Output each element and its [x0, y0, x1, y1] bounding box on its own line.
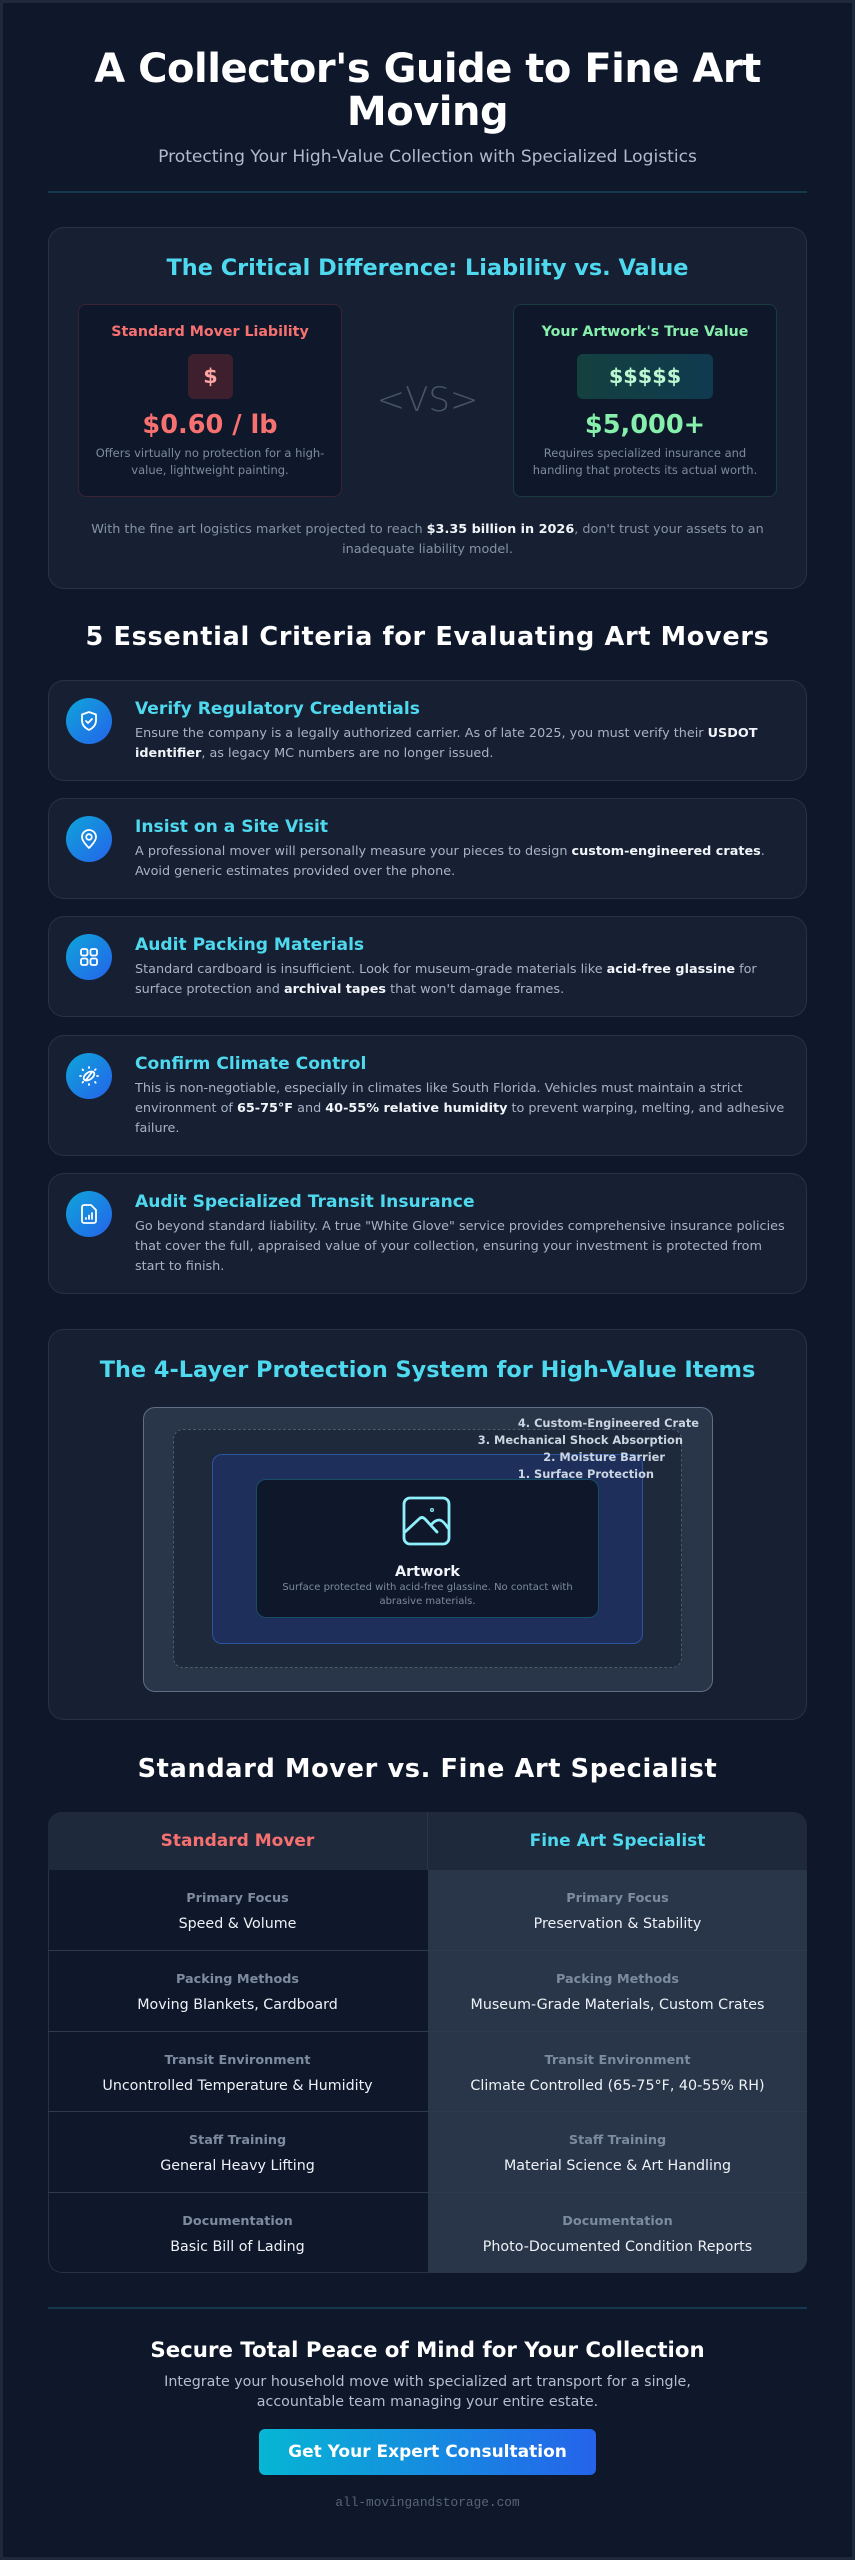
criterion text [135, 962, 757, 997]
row: documentation specialist: Photo-Documented Condition Reports [483, 2239, 752, 2255]
artwork description: abrasive materials. [379, 1596, 476, 1607]
row: primary focus standard: Primary Focus [186, 1891, 289, 1906]
header divider [48, 191, 807, 193]
market note: inadequate liability model. [342, 542, 513, 557]
criterion text [134, 1081, 784, 1136]
row: transit standard: Transit Environment [164, 2053, 310, 2068]
icon: shield check [66, 698, 112, 744]
row: staff standard [160, 2133, 315, 2174]
row: staff specialist: Material Science & Art Handling [504, 2158, 731, 2174]
row: staff standard: General Heavy Lifting [160, 2158, 315, 2174]
card: standard mover liability [78, 304, 342, 497]
artwork description: Surface protected with acid-free glassine. No contact with [282, 1582, 573, 1593]
row: primary focus specialist [534, 1891, 701, 1932]
title: A Collector's Guide to Fine Art [94, 46, 761, 92]
card title: Your Artwork's True Value [542, 324, 748, 340]
layer 3: shock absorption [173, 1429, 682, 1668]
row rule 1 [48, 1950, 807, 1951]
criterion title: Audit Packing Materials [135, 935, 364, 955]
row: staff standard: Staff Training [189, 2133, 286, 2148]
title: Moving [347, 89, 508, 135]
criterion text: surface protection and archival tapes that won't damage frames. [135, 982, 564, 997]
row: primary focus specialist: Preservation & Stability [534, 1916, 701, 1932]
artwork description [282, 1582, 573, 1607]
closing heading: Secure Total Peace of Mind for Your Collection [150, 2338, 705, 2363]
row: documentation specialist: Documentation [562, 2214, 673, 2229]
call to action button [259, 2429, 596, 2475]
layer label 1: 1. Surface Protection [518, 1467, 654, 1481]
row: documentation specialist [483, 2214, 752, 2255]
closing text [164, 2374, 691, 2410]
panel: 4-layer protection system [48, 1329, 807, 1720]
icon: map pin [66, 816, 112, 862]
value description [533, 446, 757, 477]
criterion text: This is non-negotiable, especially in climates like South Florida. Vehicles must maintain a strict [135, 1081, 743, 1096]
row: packing specialist: Museum-Grade Materials, Custom Crates [471, 1997, 764, 2013]
website: all-movingandstorage.com [335, 2495, 520, 2510]
row: packing standard: Moving Blankets, Cardboard [137, 1997, 338, 2013]
artwork label: Artwork [395, 1564, 460, 1580]
layer label 4: 4. Custom-Engineered Crate [518, 1416, 699, 1430]
closing text: Integrate your household move with specialized art transport for a single, [164, 2374, 691, 2390]
criterion text [135, 844, 765, 879]
row: packing standard [137, 1972, 338, 2013]
row: transit specialist: Climate Controlled (65-75°F, 40-55% RH) [470, 2078, 765, 2094]
value description: handling that protects its actual worth. [533, 463, 757, 477]
market note: With the fine art logistics market projected to reach $3.35 billion in 2026, don't trust your assets to an [91, 522, 764, 537]
card: artwork true value [513, 304, 777, 497]
row: documentation standard [170, 2214, 305, 2255]
criterion text: Avoid generic estimates provided over the phone. [135, 864, 455, 879]
panel heading: The Critical Difference: Liability vs. Value [166, 255, 688, 281]
row: transit specialist [470, 2053, 765, 2094]
table header: fine art specialist: Fine Art Specialist [530, 1831, 705, 1851]
icon: report document [66, 1191, 112, 1237]
layer 4: crate [143, 1407, 713, 1692]
row: primary focus specialist: Primary Focus [566, 1891, 669, 1906]
criterion text [135, 1219, 785, 1274]
criterion text: start to finish. [135, 1259, 224, 1274]
row: staff specialist [504, 2133, 731, 2174]
title [94, 46, 761, 135]
liability description: Offers virtually no protection for a high- [96, 446, 324, 460]
liability figure: $0.60 / lb [142, 410, 278, 440]
icon: five dollars [577, 354, 713, 399]
panel: liability vs value [48, 227, 807, 589]
liability description: value, lightweight painting. [131, 463, 289, 477]
criterion 3 [48, 916, 807, 1017]
row: transit standard [102, 2053, 373, 2094]
row rule 2 [48, 2031, 807, 2032]
icon: material grid [66, 934, 112, 980]
table header: standard mover: Standard Mover [161, 1831, 314, 1851]
row: transit standard: Uncontrolled Temperature & Humidity [102, 2078, 373, 2094]
criterion text: Ensure the company is a legally authorized carrier. As of late 2025, you must verify their USDOT [135, 726, 757, 741]
row: primary focus standard [179, 1891, 296, 1932]
icon: climate sun [66, 1053, 112, 1099]
call to action button: Get Your Expert Consultation [288, 2442, 567, 2462]
row: transit specialist: Transit Environment [544, 2053, 690, 2068]
icon: single dollar [188, 354, 233, 399]
layer label 2: 2. Moisture Barrier [543, 1450, 665, 1464]
criterion text: identifier, as legacy MC numbers are no longer issued. [135, 746, 494, 761]
subtitle: Protecting Your High-Value Collection with Specialized Logistics [158, 147, 697, 167]
criterion text: failure. [135, 1121, 180, 1136]
icon: single dollar: $ [203, 364, 218, 388]
panel heading: The 4-Layer Protection System for High-Value Items [100, 1357, 755, 1383]
icon: artwork image [402, 1496, 450, 1546]
section heading: comparison: Standard Mover vs. Fine Art Specialist [138, 1754, 717, 1784]
specialist column shade [428, 1870, 807, 2273]
versus marker: <VS> [377, 380, 478, 420]
criterion 2 [48, 798, 807, 899]
closing text: accountable team managing your entire estate. [257, 2394, 598, 2410]
footer divider [48, 2307, 807, 2309]
row: packing specialist [471, 1972, 764, 2013]
criterion text: environment of 65-75°F and 40-55% relative humidity to prevent warping, melting, and adhesive [135, 1101, 784, 1116]
table header: standard mover [48, 1812, 428, 1870]
value figure: $5,000+ [585, 410, 705, 440]
layer 1: surface protection [256, 1479, 599, 1618]
criterion text [135, 726, 758, 761]
row: staff specialist: Staff Training [569, 2133, 666, 2148]
criterion title: Verify Regulatory Credentials [135, 699, 420, 719]
liability description [96, 446, 324, 477]
criterion 4 [48, 1035, 807, 1156]
row: packing standard: Packing Methods [176, 1972, 299, 1987]
section heading: criteria: 5 Essential Criteria for Evaluating Art Movers [86, 622, 769, 652]
value description: Requires specialized insurance and [544, 446, 746, 460]
row: primary focus standard: Speed & Volume [179, 1916, 296, 1932]
row: documentation standard: Basic Bill of Lading [170, 2239, 305, 2255]
market note [91, 522, 764, 557]
criterion text: that cover the full, appraised value of your collection, ensuring your investment is protected from [135, 1239, 762, 1254]
criterion title: Audit Specialized Transit Insurance [135, 1192, 475, 1212]
row rule 4 [48, 2192, 807, 2193]
row rule 3 [48, 2111, 807, 2112]
row: packing specialist: Packing Methods [556, 1972, 679, 1987]
layer 2: moisture barrier [212, 1454, 643, 1644]
card title: Standard Mover Liability [111, 324, 309, 340]
criterion title: Insist on a Site Visit [135, 817, 328, 837]
criterion 1 [48, 680, 807, 781]
criterion 5 [48, 1173, 807, 1294]
criterion text: A professional mover will personally measure your pieces to design custom-engineered crates. [135, 844, 765, 859]
criterion text: Go beyond standard liability. A true "White Glove" service provides comprehensive insurance policies [135, 1219, 785, 1234]
icon: five dollars: $$$$$ [609, 364, 681, 388]
comparison table [48, 1812, 807, 2273]
criterion title: Confirm Climate Control [135, 1054, 366, 1074]
criterion text: Standard cardboard is insufficient. Look for museum-grade materials like acid-free glassine for [135, 962, 757, 977]
row: documentation standard: Documentation [182, 2214, 293, 2229]
layer label 3: 3. Mechanical Shock Absorption [478, 1433, 683, 1447]
table header: fine art specialist [428, 1812, 807, 1870]
